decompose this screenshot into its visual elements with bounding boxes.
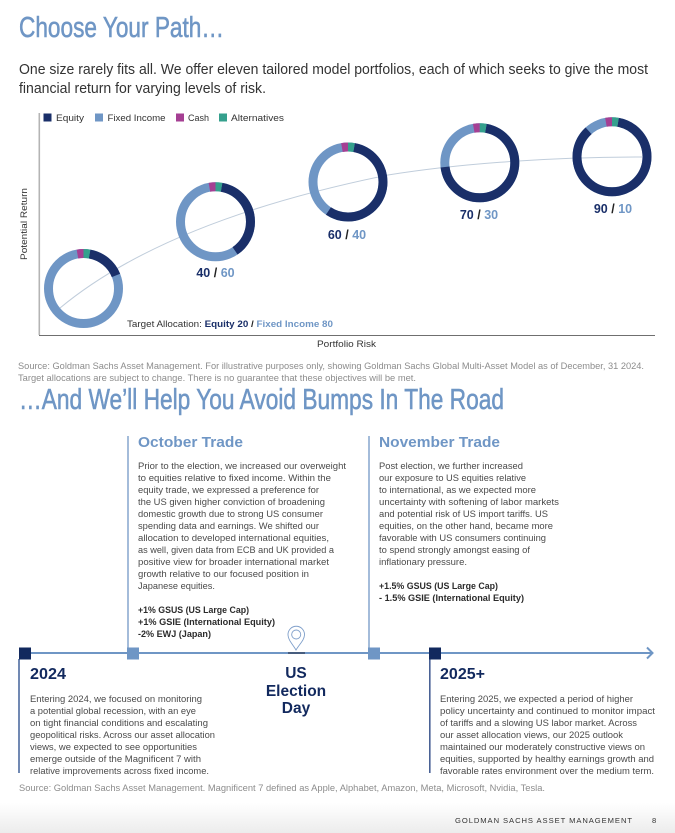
November heading: November Trade xyxy=(379,435,500,451)
US Election Day label: Election xyxy=(266,683,326,700)
2025 body: equities, supported by healthy earnings growth and xyxy=(440,754,654,765)
October body: Japanese equities. xyxy=(138,581,215,592)
efficient frontier curve xyxy=(60,157,642,308)
2025 body: policy uncertainty and continued to monitor impact xyxy=(440,706,655,717)
donut 40/60 xyxy=(180,187,250,257)
intro text: financial return for varying levels of risk. xyxy=(19,81,266,97)
legend: Fixed Income xyxy=(108,113,166,123)
2024 body: on tight financial conditions and escalating xyxy=(30,718,208,729)
legend: Equity xyxy=(56,113,85,123)
November body: and potential risk of US import tariffs. US xyxy=(379,509,548,520)
November trades xyxy=(379,581,524,604)
second heading: …And We’ll Help You Avoid Bumps In The Road xyxy=(19,384,504,416)
October body: positive view for broader international market xyxy=(138,557,329,568)
target allocation label: Target Allocation: Equity 20 / Fixed Income 80 xyxy=(127,319,333,330)
October body: Prior to the election, we increased our overweight xyxy=(138,461,346,472)
November trades: +1.5% GSUS (US Large Cap) xyxy=(379,581,498,592)
November body: inflationary pressure. xyxy=(379,557,467,568)
November body: equities, on the other hand, became more xyxy=(379,521,553,532)
October trades: -2% EWJ (Japan) xyxy=(138,629,211,640)
October trades: +1% GSUS (US Large Cap) xyxy=(138,605,249,616)
chart source note: Target allocations are subject to change. There is no guarantee that these objectives will be met. xyxy=(18,373,416,384)
donut 90/10 xyxy=(577,122,647,192)
October body: allocation to developed international equities, xyxy=(138,533,329,544)
icon: election pin xyxy=(288,626,305,653)
label 70/30: 70 / 30 xyxy=(460,208,498,222)
marker stems xyxy=(128,436,369,653)
October trades: +1% GSIE (International Equity) xyxy=(138,617,275,628)
footer band xyxy=(0,803,675,833)
donut 70/30 xyxy=(445,128,515,198)
October body: spending data and earnings. We shifted our xyxy=(138,521,320,532)
2024 body: views, we expected to see opportunities xyxy=(30,742,197,753)
November Trade panel xyxy=(379,435,559,604)
US Election Day label: US xyxy=(285,665,307,682)
November body: to spend strongly amongst easing of xyxy=(379,545,530,556)
donut 20/80 xyxy=(48,254,118,324)
2024 marker xyxy=(18,648,31,773)
intro text xyxy=(19,62,648,97)
October body: growth relative to our focused position in xyxy=(138,569,309,580)
October body: the US given higher conviction of broadening xyxy=(138,497,325,508)
2025 body: Entering 2025, we expected a period of higher xyxy=(440,694,634,705)
2024 heading: 2024 xyxy=(30,666,66,683)
title: Choose Your Path… xyxy=(19,12,224,44)
November body: uncertainty with softening of labor markets xyxy=(379,497,559,508)
y axis label: Potential Return xyxy=(19,188,29,260)
timeline xyxy=(18,436,652,773)
2025 body: favorable rates environment over the medium term. xyxy=(440,766,654,777)
legend: Alternatives xyxy=(231,113,285,123)
timeline axis with arrow xyxy=(19,648,652,658)
October trades xyxy=(138,605,275,640)
legend: Cash xyxy=(188,113,209,123)
US Election Day label: Day xyxy=(282,700,311,717)
page number: 8 xyxy=(652,816,656,825)
2025 marker xyxy=(429,648,441,773)
2025 body xyxy=(440,694,655,777)
2025 body: of tariffs and a slowing US labor market. Across xyxy=(440,718,637,729)
November body xyxy=(379,461,559,568)
October Trade panel xyxy=(138,435,346,640)
2024 body: geopolitical risks. Across our asset allocation xyxy=(30,730,215,741)
x axis label: Portfolio Risk xyxy=(317,339,377,349)
October heading: October Trade xyxy=(138,435,243,451)
chart source note: Source: Goldman Sachs Asset Management. For illustrative purposes only, showing Goldman Sachs Global Multi-Asset Model as of December, 31 2024. xyxy=(18,361,644,372)
2024 body xyxy=(30,694,215,777)
label 60/40: 60 / 40 xyxy=(328,228,366,242)
donut 60/40 xyxy=(313,147,383,217)
x axis xyxy=(39,335,655,336)
2024 panel xyxy=(30,666,215,777)
November marker xyxy=(368,648,380,660)
2025+ panel xyxy=(440,666,655,777)
2024 body: relative improvements across fixed income. xyxy=(30,766,209,777)
October body: to equities relative to fixed income. Within the xyxy=(138,473,331,484)
2025 body: maintained our moderately constructive views on xyxy=(440,742,645,753)
US Election Day label xyxy=(266,665,326,717)
legend xyxy=(44,113,285,123)
2025 body: our asset allocation views, our 2025 outlook xyxy=(440,730,623,741)
2024 body: Entering 2024, we focused on monitoring xyxy=(30,694,202,705)
November trades: - 1.5% GSIE (International Equity) xyxy=(379,593,524,604)
November body: to international, as we expected more xyxy=(379,485,536,496)
footer text: GOLDMAN SACHS ASSET MANAGEMENT xyxy=(455,816,632,825)
November body: our exposure to US equities relative xyxy=(379,473,526,484)
label 90/10: 90 / 10 xyxy=(594,202,632,216)
chart: risk and return donuts xyxy=(19,113,655,349)
October marker xyxy=(127,648,139,660)
October body: equity trade, we expressed a preference for xyxy=(138,485,320,496)
November body: favorable with US consumers continuing xyxy=(379,533,546,544)
y axis xyxy=(38,113,40,335)
timeline source note: Source: Goldman Sachs Asset Management. Magnificent 7 defined as Apple, Alphabet, Amazon, Meta, Microsoft, Nvidia, Tesla. xyxy=(19,783,545,794)
2024 body: emerge outside of the Magnificent 7 with xyxy=(30,754,201,765)
chart source note xyxy=(18,361,644,384)
October body: as well, given data from ECB and UK provided a xyxy=(138,545,335,556)
October body: domestic growth due to strong US consumer xyxy=(138,509,324,520)
intro text: One size rarely fits all. We offer eleven tailored model portfolios, each of which seeks to give the most xyxy=(19,62,648,78)
2025 heading: 2025+ xyxy=(440,666,485,683)
2024 body: a potential global recession, with an eye xyxy=(30,706,196,717)
October body xyxy=(138,461,346,592)
November body: Post election, we further increased xyxy=(379,461,523,472)
label 40/60: 40 / 60 xyxy=(196,266,235,280)
